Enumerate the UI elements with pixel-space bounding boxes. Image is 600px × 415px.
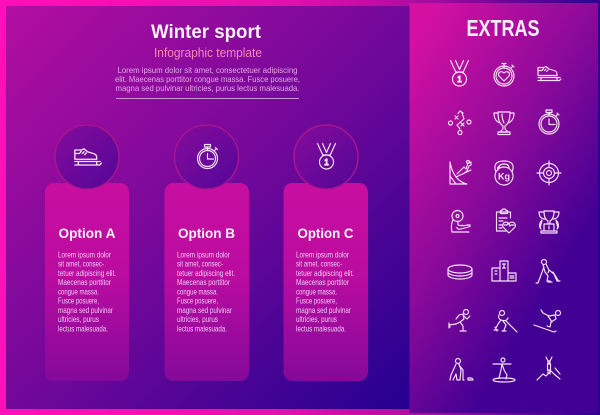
panel: option A bbox=[45, 125, 129, 381]
icon: clipboard heart bbox=[496, 209, 515, 233]
icon: hockey player bbox=[536, 260, 560, 283]
icon: mountain climber bbox=[537, 357, 560, 380]
body: option C: Maecenas porttitor bbox=[296, 278, 349, 287]
icon circle: medal bbox=[294, 125, 358, 189]
body: option A: congue massa. bbox=[58, 288, 99, 296]
body: option A: magna sed pulvinar bbox=[58, 306, 113, 315]
body: option B: lectus malesuada. bbox=[177, 324, 227, 333]
icon circle: stopwatch bbox=[174, 125, 238, 189]
icon: game plan bbox=[448, 111, 471, 134]
icon: trophy with wreath bbox=[539, 211, 559, 233]
body: option B: ultricies, purus bbox=[177, 315, 218, 324]
heading: option B: Option B bbox=[178, 225, 235, 241]
panel: main bbox=[6, 6, 410, 409]
body: option A: lectus malesuada. bbox=[58, 324, 108, 333]
body: option C: tetuer adipiscing elit. bbox=[296, 269, 354, 278]
icon: speed skater bbox=[449, 310, 470, 331]
title: Winter sport bbox=[151, 22, 262, 43]
icon: heart stopwatch bbox=[494, 64, 514, 86]
body: option B bbox=[177, 250, 235, 333]
body: option C: magna sed pulvinar bbox=[296, 306, 351, 315]
heading: option C: Option C bbox=[298, 225, 354, 241]
body: option C: lectus malesuada. bbox=[296, 324, 346, 333]
icon: medal bbox=[450, 60, 468, 86]
body: option C bbox=[296, 250, 354, 333]
icon: trophy bbox=[494, 112, 514, 134]
body: option A: ultricies, purus bbox=[58, 315, 99, 324]
body: option B: Lorem ipsum dolor bbox=[177, 250, 230, 260]
body: option A: tetuer adipiscing elit. bbox=[58, 269, 116, 278]
body: option B: Maecenas porttitor bbox=[177, 278, 230, 287]
intro text: Lorem ipsum dolor sit amet, consectetuer adipiscing bbox=[118, 65, 298, 75]
heading: option A: Option A bbox=[58, 225, 116, 241]
heading: extras: EXTRAS bbox=[466, 15, 540, 41]
icon: skier bbox=[534, 310, 560, 332]
icon: target bbox=[537, 161, 561, 185]
body: option C: ultricies, purus bbox=[296, 315, 337, 324]
icon: hockey skater bbox=[494, 310, 517, 332]
icon: hockey puck bbox=[448, 265, 472, 279]
icon: kettlebell: Kg bbox=[498, 172, 510, 182]
icon circle: skate bbox=[55, 125, 119, 189]
icon: figure skater bbox=[493, 358, 515, 382]
icon: curling player bbox=[450, 358, 473, 380]
body: option C: Lorem ipsum dolor bbox=[296, 250, 349, 260]
body: option B: sit amet, consec- bbox=[177, 260, 223, 269]
body: option C: Fusce posuere, bbox=[296, 297, 337, 306]
body: option B: congue massa. bbox=[177, 288, 218, 296]
icon: podium bbox=[492, 261, 516, 281]
panel: option B bbox=[164, 125, 249, 381]
body: option A: Maecenas porttitor bbox=[58, 278, 111, 287]
body: option A: Fusce posuere, bbox=[58, 297, 99, 306]
subtitle: Infographic template bbox=[154, 46, 262, 60]
icon: arm with weight bbox=[451, 210, 470, 232]
body: option A: sit amet, consec- bbox=[58, 260, 104, 269]
body: option C: sit amet, consec- bbox=[296, 260, 342, 269]
body: option B: tetuer adipiscing elit. bbox=[177, 269, 235, 278]
icon: kettlebell bbox=[495, 161, 513, 185]
body: option B: magna sed pulvinar bbox=[177, 306, 232, 315]
panel: extras bbox=[410, 3, 598, 413]
icon: ice skate bbox=[538, 66, 561, 80]
body: option A: Lorem ipsum dolor bbox=[58, 250, 111, 260]
intro text bbox=[115, 65, 300, 93]
panel: option C bbox=[284, 125, 368, 381]
body: option A bbox=[58, 250, 116, 333]
icon: stopwatch bbox=[539, 110, 559, 134]
intro text: elit. Maecenas porttitor congue massa. Fusce posuere, bbox=[115, 74, 300, 84]
body: option B: Fusce posuere, bbox=[177, 297, 218, 306]
icon: ski jump bbox=[450, 160, 471, 184]
intro text: magna sed pulvinar ultricies, purus lectus malesuada. bbox=[116, 83, 300, 93]
body: option C: congue massa. bbox=[296, 288, 337, 296]
